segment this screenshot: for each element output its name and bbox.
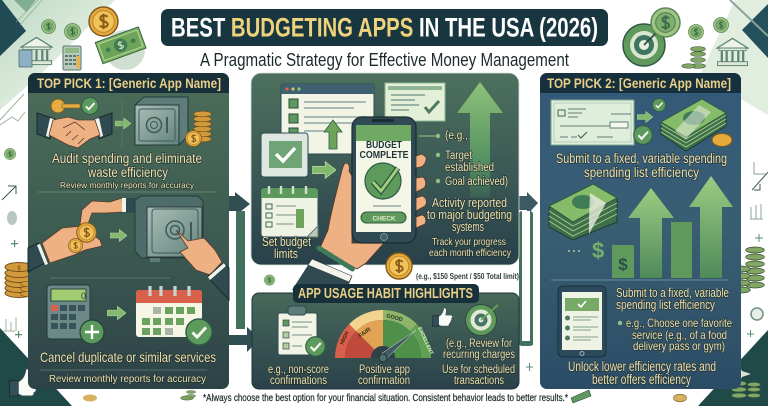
corner decoration: bottom right [698,330,768,406]
list: favorite service: service (e.g., of a food [632,328,727,342]
icon: phone showing budget complete [352,117,416,243]
icon: left margin coin stacks: $ [17,266,21,272]
icon: clipboard with check [278,306,325,356]
text: set budget limits [262,234,311,261]
icon: key and check [51,98,98,114]
icon: arrow [107,306,126,320]
icon: hand holding phone [320,163,384,269]
icon: arrow [637,111,653,123]
panel: app usage habit highlights [252,284,519,389]
icon: left margin thumbs up [9,369,39,396]
icon: receipt card with check [385,83,445,121]
icon: left margin small marks [4,148,22,338]
text: recurring charges: recurring charges [443,349,515,361]
icon: budget calendar [261,186,318,237]
text: recurring charges: Use for scheduled [442,364,515,376]
subtitle: A Pragmatic Strategy for Effective Money Management [200,50,569,70]
chart: growth bars and arrows [612,176,733,278]
panel: top pick 2 [540,73,741,389]
list: goal bullets [419,130,508,188]
list: goal bullets: Goal achieved) [445,176,508,188]
icon: money stack [661,99,726,151]
icon: dots and dollar sign [568,238,604,263]
panel: top pick 1 [28,73,229,389]
footer note: *Always choose the best option for your financial situation. Consistent behavior leads to better results.* [203,392,568,404]
list: favorite service [618,316,732,353]
icon: phone showing budget complete: BUDGET [366,140,402,151]
text: activity reported: Activity reported [432,196,507,210]
corner decoration: top right [700,0,768,190]
text: submit list: spending list efficiency [616,298,716,312]
text: positive confirmation: confirmation [358,375,410,387]
icon: footer money left [83,390,196,402]
icon: money stack large [549,184,617,240]
icon: arrow [115,118,131,129]
text: activity reported: to major budgeting [427,208,512,222]
text: activity reported: systems [452,220,484,234]
connector: left panel to center top [228,192,250,335]
text: review reports: Review monthly reports for accuracy [49,373,207,385]
note: spending example: (e.g., $150 Spent / $50 Total limit) [416,271,519,281]
icon: safe with pointing hand [135,196,229,300]
icon: hands passing coins [28,198,136,272]
icon: check badges [634,98,666,144]
text: submit list: Submit to a fixed, variable [616,286,729,300]
text: unlock rates [568,359,716,387]
heading pill [293,284,479,303]
icon: footer money right [571,390,686,403]
icon: tablet [558,286,606,357]
icon: fingers on phone [416,154,426,228]
text: submit list [616,286,729,312]
text: activity reported: each month efficiency [429,247,512,259]
text: recurring charges: (e.g., Review for [446,338,512,350]
icon: cuff and bracelet [292,248,354,293]
text: activity reported [427,196,512,259]
connector: left panel to app usage [229,327,260,352]
chart: credit style gauge [335,310,434,362]
icon: calculator with plus [47,285,104,344]
icon: gold coin [386,253,412,279]
list: goal bullets: Target [445,150,473,162]
title banner: BEST BUDGETING APPS IN THE USA (2026) [171,12,598,42]
heading: top pick 1: TOP PICK 1: [Generic App Name] [37,75,221,91]
icon: calculator with plus: 0 [81,291,86,301]
text: activity reported: Track your progress [432,236,506,248]
chart: credit style gauge: FAIR [358,327,373,340]
chart: growth bars and arrows: $ [618,255,628,274]
heading: top pick 2: TOP PICK 2: [Generic App Name] [547,75,731,91]
text: unlock rates: better offers efficiency [592,372,691,387]
icon: check document [551,100,634,145]
list: goal bullets: established [445,162,494,174]
icon: right corner coin stack and sparkle [725,363,761,398]
list: goal bullets: (e.g., [445,130,468,142]
icon: arrow [312,162,336,178]
icon: handshake [37,113,112,148]
corner decoration: bottom left [0,328,72,406]
text: recurring charges [442,338,515,387]
list: favorite service: e.g., Choose one favorite [626,316,732,330]
text: recurring charges: transactions [454,375,504,387]
connector: right loop to top pick 2 [519,192,538,346]
list: favorite service: delivery pass or gym) [633,339,725,353]
icon: check window [261,133,308,177]
text: audit spending: waste efficiency [87,165,168,180]
icon: target [466,304,498,336]
text: audit spending: Audit spending and eliminate [52,151,202,166]
icon: phone showing budget complete: COMPLETE [360,150,409,161]
icon: coin [712,134,732,146]
text: positive confirmation [358,364,410,387]
text: cancel duplicates: Cancel duplicate or similar services [40,349,216,365]
text: audit spending [52,151,202,190]
icon: calendar with check [136,286,212,345]
icon: dots and dollar sign: $ [592,238,604,263]
icon: safe with coins [135,97,211,146]
icon: thumbs up [433,308,453,326]
text: unlock rates: Unlock lower efficiency rates and [568,359,716,374]
heading pill: APP USAGE HABIT HIGHLIGHTS [298,286,473,302]
panel header: top pick 1 [28,73,229,93]
icon: large up arrow [457,82,503,197]
icon: arrow [110,230,127,241]
text: set budget limits: Set budget [262,234,311,249]
text: submit fixed: spending list efficiency [584,165,699,180]
icon: phone showing budget complete: CHECK [372,216,396,222]
text: submit fixed [556,151,727,180]
text: non-score: confirmations [270,375,327,387]
chart: credit style gauge: EXCELLENT [416,326,434,356]
panel: budget complete [251,73,519,269]
chart: credit style gauge: HIGH [339,331,351,346]
icon: left margin coin stacks [3,262,38,331]
panel header: top pick 2 [540,73,741,93]
text: set budget limits: limits [274,246,298,261]
icon: top right goal cluster [623,8,748,68]
corner decoration: top left [0,0,115,200]
text: non-score: e.g., non-score [268,364,329,376]
chart: credit style gauge: GOOD [385,313,403,323]
icon: small green coin [264,275,275,285]
text: non-score [268,364,329,387]
text: positive confirmation: Positive app [359,364,410,376]
icon: right margin coin stacks [526,204,764,371]
text: submit fixed: Submit to a fixed, variable spending [556,151,727,166]
icon: top left finance cluster [19,7,146,70]
text: audit spending: Review monthly reports for accuracy [60,180,195,190]
icon: checklist window [281,84,374,154]
